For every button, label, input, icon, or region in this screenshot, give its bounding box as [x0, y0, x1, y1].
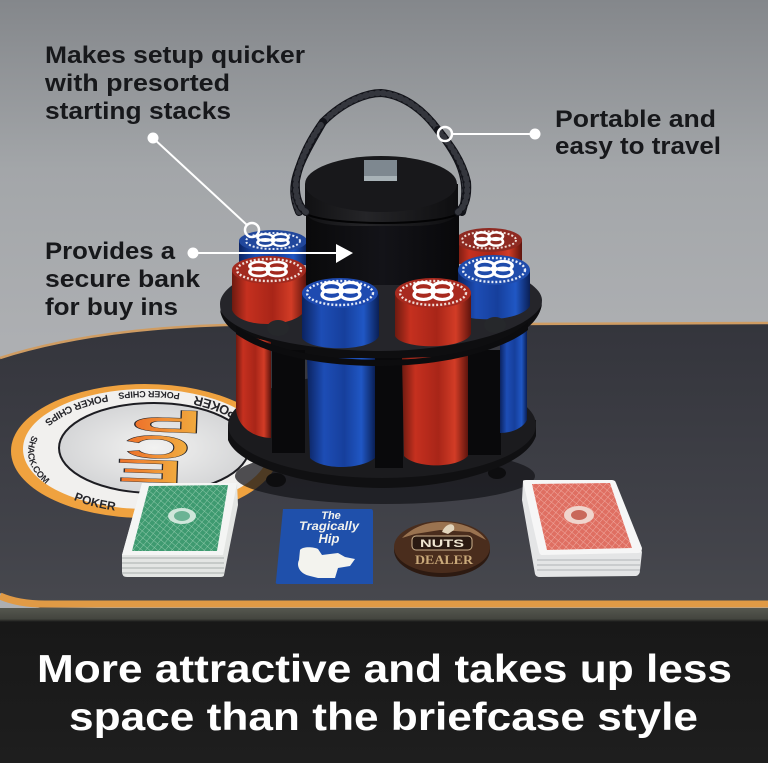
- callout: portable: Portable and: [555, 106, 716, 133]
- lower blue right: [500, 330, 527, 433]
- bottom tray: [228, 420, 536, 488]
- printed PCE table logo: [11, 384, 273, 518]
- tube front right blue: [458, 255, 530, 319]
- dealer button chip: [394, 521, 490, 577]
- back rope handle: [294, 93, 465, 212]
- headline caption: [37, 648, 732, 739]
- table edge: orange bottom trim: [0, 596, 768, 604]
- chip carousel: [220, 93, 542, 504]
- tube center blue: [302, 278, 379, 348]
- logo ring text: POKER: [194, 396, 233, 418]
- tube center red: [395, 278, 471, 346]
- callout: presorted stacks: [44, 42, 305, 237]
- pointer: [438, 127, 540, 141]
- callout: secure bank: secure bank: [45, 266, 201, 293]
- tray knobs: [267, 320, 289, 336]
- blue card: [276, 509, 373, 584]
- logo ring text: [28, 391, 233, 511]
- callout: portable: [438, 106, 721, 160]
- bottom caption band: [0, 608, 768, 763]
- logo ring text: SHACK.COM: [28, 436, 50, 484]
- chip text NUTS: NUTS: [420, 538, 464, 550]
- callout: presorted stacks: with presorted: [44, 70, 230, 97]
- logo letters PCE: P: [131, 402, 205, 440]
- tube back blue: [239, 230, 307, 265]
- card title: [299, 510, 360, 546]
- card title: The: [321, 510, 341, 522]
- feet: [266, 473, 286, 487]
- front rope handle: [296, 122, 467, 212]
- card title: Hip: [319, 531, 340, 546]
- lid latch: [364, 160, 397, 181]
- lower red center: [402, 356, 468, 465]
- callout: presorted stacks: Makes setup quicker: [45, 42, 305, 69]
- carousel shadow: [235, 448, 535, 504]
- callout: presorted stacks: starting stacks: [45, 98, 231, 125]
- logo ring text: POKER CHIPS: [118, 391, 180, 400]
- logo letters PCE: [114, 402, 205, 490]
- logo letters PCE: E: [114, 452, 185, 490]
- headline caption: More attractive and takes up less: [37, 648, 732, 691]
- callout: secure bank: [45, 238, 353, 321]
- red card deck: [522, 480, 642, 577]
- logo letters PCE: C: [124, 428, 192, 466]
- headline caption: space than the briefcase style: [69, 696, 698, 739]
- pointer: [148, 132, 259, 237]
- logo ring text: POKER CHIPS: [46, 394, 108, 426]
- arrow: [188, 244, 353, 263]
- black support posts: [272, 350, 501, 468]
- center bank canister: [305, 156, 459, 310]
- card title: Tragically: [299, 519, 360, 533]
- lower blue center: [307, 358, 375, 467]
- table edge: orange top trim: [0, 323, 768, 358]
- card silhouette: [298, 547, 355, 578]
- top tray plate: [220, 268, 542, 361]
- tube back red: [456, 228, 522, 264]
- tray underside: [236, 322, 528, 366]
- canister lid: [305, 184, 458, 226]
- callout: portable: easy to travel: [555, 133, 721, 160]
- logo ring text: CUI: [213, 482, 239, 505]
- tube front left red: [232, 256, 306, 324]
- poker table: [0, 323, 768, 608]
- lower red left: [236, 333, 271, 438]
- callout: secure bank: for buy ins: [45, 294, 178, 321]
- callout: secure bank: Provides a: [45, 238, 176, 265]
- chip text DEALER: DEALER: [415, 552, 474, 567]
- logo ring text: POKER: [74, 492, 116, 511]
- green card deck: [122, 483, 238, 577]
